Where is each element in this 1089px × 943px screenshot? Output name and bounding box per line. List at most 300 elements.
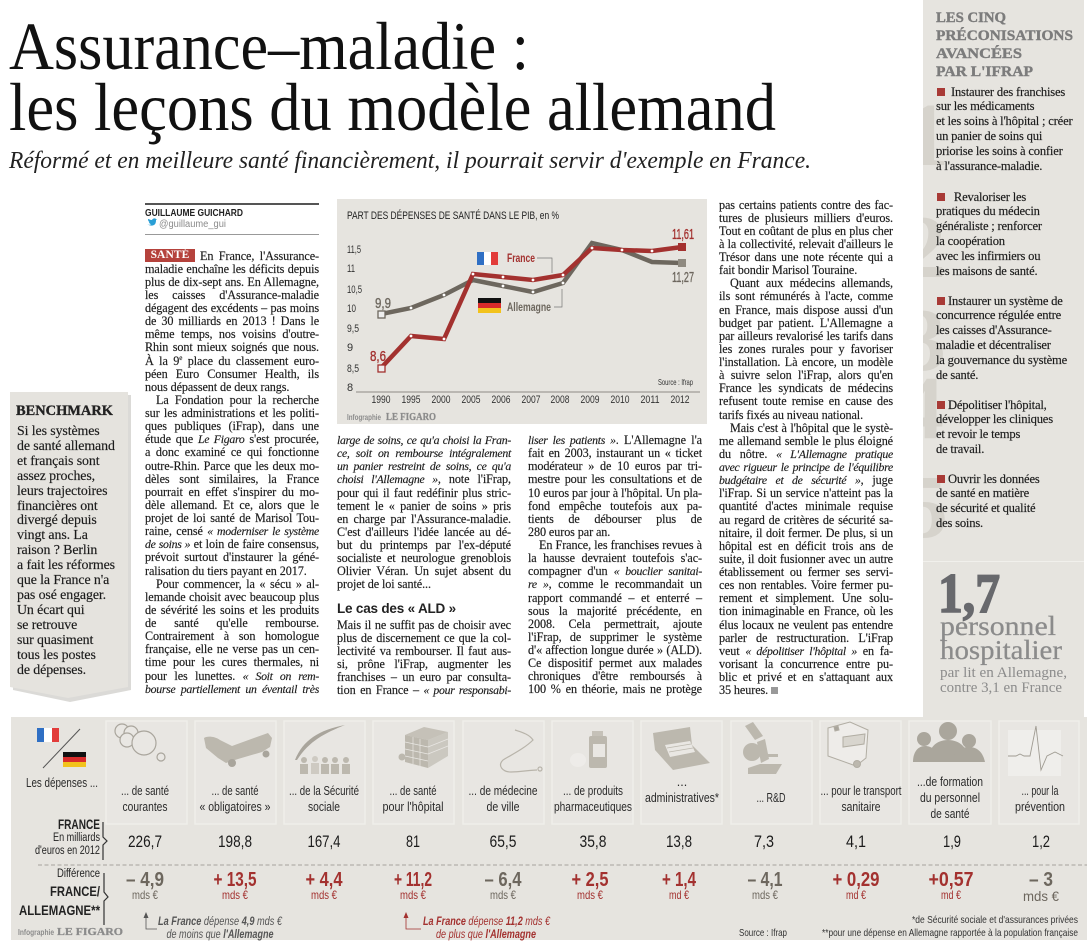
article column 1: raine, censé « moderniser le système: [145, 524, 319, 538]
article column 4: l'iFrap. Si un service n'atteint pas la: [719, 486, 893, 500]
article column 4: tarifs fixés au niveau national.: [719, 408, 863, 422]
article column 1: étude que Le Figaro s'est procurée,: [145, 432, 319, 446]
article column 4: par ailleurs revalorisé les tarifs dans: [719, 329, 893, 343]
recommendation 5: de sécurité et qualité: [936, 501, 1035, 515]
panel: sidebar préconisations: PAR L'IFRAP: [936, 64, 1033, 80]
recommendation 3: les caisses d'Assurance-: [936, 323, 1052, 337]
article column 2 continued: si, prône l'iFrap, augmenter les: [337, 657, 511, 671]
row label: france: En milliards: [53, 832, 100, 844]
recommendation 2: les maisons de santé.: [936, 264, 1037, 278]
text: 9: [347, 342, 353, 354]
text: tous les postes: [17, 648, 96, 663]
icon: hospital bed: [204, 733, 272, 767]
row: difference values: +0,57: [928, 869, 974, 891]
icon: social security: [295, 725, 350, 774]
row label: différence: FRANCE/: [50, 883, 100, 899]
column headings: du personnel: [920, 791, 980, 805]
recommendation 5: [936, 472, 1040, 530]
text: Infographie: [347, 413, 381, 422]
column headings: courantes: [122, 800, 168, 814]
article column 4: au regard de critères de sécurité sa-: [719, 512, 893, 526]
row: france values: 226,7: [128, 832, 162, 851]
article column 1: lemande choisit avec beaucoup plus: [145, 590, 319, 604]
article column 4: du nôtre. « L'Allemagne pratique: [719, 447, 893, 461]
text: 10: [347, 303, 356, 315]
recommendation 3: Instaurer un système de: [948, 294, 1063, 308]
article column 1: dèle allemand. Et ce, alors que le: [145, 498, 319, 512]
article column 4: budget par patient. L'Allemagne a: [719, 316, 893, 330]
recommendation 1: Instaurer des franchises: [951, 84, 1065, 98]
text: financières ont: [17, 499, 98, 514]
footnotes: [822, 914, 1078, 939]
row: units: mds €: [752, 888, 778, 902]
column headings: ... R&D: [756, 791, 786, 805]
article column 4: nitaire, il doit fermer. De plus, si un: [719, 526, 893, 540]
recommendation 3: maladie et décentraliser: [936, 338, 1051, 352]
recommendation 1: sur les médicaments: [936, 99, 1034, 113]
title: [9, 8, 776, 145]
article column 3: rapport commandé – et enterré –: [528, 590, 702, 604]
article column 1: nous dépassent de deux rangs.: [145, 380, 289, 394]
recommendation 4: développer les cliniques: [936, 412, 1053, 426]
text: leurs trajectoires: [17, 484, 107, 499]
key figure: 1,7 personnel hospitalier: par lit en Allemagne,: [940, 665, 1067, 681]
recommendation 4: de travail.: [936, 442, 984, 456]
column headings: [121, 775, 1065, 821]
text: Si les systèmes: [17, 424, 100, 439]
icon: document: [653, 727, 710, 770]
article column 1: dèles sont similaires, la France: [145, 472, 319, 486]
article column 4: parler de restructuration. L'iFrap: [719, 631, 893, 645]
article column 2: large de soins, ce qu'a choisi la Fran-: [337, 433, 511, 447]
text: et français sont: [17, 454, 99, 469]
article column 2: but du printemps par l'ex-député: [337, 538, 511, 552]
article column 1: de soins » et loin de faire consensus,: [145, 537, 319, 551]
row: difference values: + 4,4: [306, 869, 343, 891]
column headings: ... de santé: [121, 784, 169, 798]
byline: GUILLAUME GUICHARD: [145, 208, 243, 219]
panel: sidebar préconisations: AVANCÉES: [936, 45, 1022, 62]
key figure: 1,7 personnel hospitalier: contre 3,1 en France: [940, 680, 1062, 696]
article column 2 continued: Mais il ne suffit pas de choisir avec: [337, 618, 511, 632]
article column 4: rement et simplement. Une solu-: [719, 591, 893, 605]
article column 3: 10 euros par jour à l'hôpital. Un pla-: [528, 486, 702, 500]
text: 8,6: [370, 348, 386, 365]
article column 3: compagner d'un « bouclier sanitai-: [528, 564, 702, 578]
article column 1: ralisation du tiers payant en 2017.: [145, 564, 307, 578]
article column 4: tion inimaginable en France, où les: [719, 604, 893, 618]
icon: stethoscope: [501, 730, 542, 772]
article column 4: Trésor dans une note récente qui a: [719, 250, 893, 264]
text: 2009: [580, 394, 600, 406]
row: units: mds €: [1023, 888, 1059, 904]
article column 4: blic et privé et en s'attaquant aux: [719, 670, 893, 684]
recommendation 2: généraliste ; renforcer: [936, 219, 1042, 233]
row: difference values: [126, 869, 1053, 891]
recommendation 1: un panier de soins qui: [936, 129, 1042, 143]
row label: france: d'euros en 2012: [35, 845, 100, 857]
recommendation 2: [936, 190, 1042, 278]
article column 2: tement le « panier de soins » pris: [337, 499, 511, 513]
text: 2012: [670, 394, 690, 406]
recommendation 1: à l'assurance-maladie.: [936, 159, 1042, 173]
annotation: plus que l'Allemagne: [423, 914, 551, 941]
recommendation 2: la coopération: [936, 234, 1005, 248]
text: 1995: [402, 394, 420, 406]
row: difference values: – 4,1: [748, 869, 782, 891]
article column 4: tures de plusieurs milliers d'euros.: [719, 211, 893, 225]
column headings: « obligatoires »: [200, 800, 271, 814]
recommendation 2: avec les infirmiers ou: [936, 249, 1040, 263]
text: LE FIGARO: [386, 412, 436, 423]
article column 1: pour les lunettes. « Soit on rem-: [145, 668, 319, 682]
article column 3: fond empêche toutefois aux pa-: [528, 499, 702, 513]
article column 1: [145, 248, 320, 696]
article column 1: de 30 milliards en 2013 ! Dans le: [145, 314, 319, 328]
row: france values: 167,4: [308, 832, 340, 851]
column headings: ... pour la: [1022, 784, 1059, 798]
annotation: moins que l'Allemagne: de moins que l'Allemagne: [166, 927, 274, 941]
text: 9,9: [375, 295, 391, 312]
article column 4: vorisant la concurrence entre pu-: [719, 657, 893, 671]
row: units: mds €: [400, 888, 426, 902]
text: raison ? Berlin: [17, 543, 97, 558]
article column 3: 100 % en théorie, mais ne protège: [528, 682, 702, 696]
icon: ambulance: [828, 722, 868, 768]
row: france values: 65,5: [490, 832, 516, 851]
text: 2011: [640, 394, 660, 406]
key figure: 1,7 personnel hospitalier: personnel: [940, 611, 1056, 641]
icon: coins: [115, 724, 165, 761]
article column 4: les zones rurales pour y favoriser: [719, 342, 893, 356]
row: units: mds €: [490, 888, 516, 902]
recommendation 2: Revaloriser les: [954, 190, 1026, 204]
row: france values: 4,1: [846, 832, 866, 851]
text: France: [507, 251, 535, 265]
column headings: ... de produits: [563, 784, 623, 798]
text: a fait les réformes: [17, 558, 115, 573]
row: difference values: – 4,9: [126, 869, 164, 891]
article column 4: veut « dépolitiser l'hôpital » en fa-: [719, 644, 893, 658]
article column 3: la hausse devraient toutefois s'ac-: [528, 551, 702, 565]
row: difference values: + 13,5: [214, 869, 256, 891]
icon: france germany flags: [37, 728, 86, 768]
recommendation 5: de santé en matière: [936, 486, 1029, 500]
row: units: mds €: [311, 888, 337, 902]
source: Source : Ifrap: [739, 927, 787, 939]
article column 1: En France, l'Assurance-: [200, 248, 319, 262]
row label: différence: [19, 868, 100, 918]
article column 1: de sévérité les soins et les produits: [145, 603, 319, 617]
article column 1: La Fondation pour la recherche: [156, 393, 319, 407]
panel: sidebar préconisations: LES CINQ: [936, 10, 1006, 26]
article column 4: l'installation. Là encore, un modèle: [719, 355, 893, 369]
recommendation 2: pratiques du médecin: [936, 204, 1040, 218]
text: Allemagne: [507, 300, 551, 314]
row: difference values: + 0,29: [832, 869, 880, 891]
article column 4: avec rigueur le principe de l'équilibre: [719, 460, 893, 474]
chart panel: part des dépenses de santé dans le PIB: [337, 199, 707, 424]
article column 1: pourrait en effet s'inspirer du mo-: [145, 485, 319, 499]
article column 4: ces non rentables. Voire fermer pu-: [719, 578, 893, 592]
article column 4: 35 heures.: [719, 683, 768, 697]
article column 4: quantité d'actes minimale requise: [719, 499, 893, 513]
text: 2008: [550, 394, 570, 406]
article column 3: sous la majorité précédente, en: [528, 604, 702, 618]
article column 4: en France, mais dispose aussi d'un: [719, 302, 893, 316]
annotation: moins que l'Allemagne: La France dépense 4,9 mds €: [158, 914, 283, 928]
text: 11,61: [672, 226, 694, 243]
article column 2: ce, soit on rembourse intégralement: [337, 446, 511, 460]
row: units: md €: [941, 888, 961, 902]
annotation: plus que l'Allemagne: de plus que l'Allemagne: [436, 927, 536, 941]
icon: surgeons: [913, 722, 985, 762]
column headings: pour l'hôpital: [382, 800, 444, 814]
key figure: 1,7 personnel hospitalier: 1,7: [938, 563, 1000, 625]
article column 1: sur les administrations et les politi-: [145, 406, 319, 420]
article column 2: pour qui il faut redéfinir plus stric-: [337, 486, 511, 500]
article column 1: les caisses d'Assurance-maladie: [145, 288, 319, 302]
article column 3: re », comme le recommandait un: [528, 577, 702, 591]
row: units: mds €: [577, 888, 603, 902]
row label: différence: ALLEMAGNE**: [19, 902, 100, 918]
row: france values: [128, 832, 1050, 851]
article column 1: projet de loi santé de Marisol Tou-: [145, 511, 319, 525]
article column 2: Olivier Véran. Un sujet absent du: [337, 564, 511, 578]
recommendation 1: et les soins à l'hôpital ; créer: [936, 114, 1072, 128]
text: se retrouve: [17, 618, 77, 633]
text: PART DES DÉPENSES DE SANTÉ DANS LE PIB, en %: [347, 209, 559, 222]
article column 1: de santé qu'elle rembourse.: [145, 616, 319, 630]
column headings: ...: [677, 775, 687, 789]
article column 2 continued: lectivité va rembourser. Il faut aus-: [337, 644, 511, 658]
byline: [145, 203, 319, 235]
article column 1: prévoit surtout d'instaurer la géné-: [145, 550, 319, 564]
article column 2 continued: [337, 618, 511, 697]
article column 2: projet de loi santé...: [337, 577, 431, 591]
annotation: plus que l'Allemagne: La France dépense 11,2 mds €: [423, 914, 551, 928]
row label: france: FRANCE: [58, 816, 100, 832]
article column 4: pas certains patients contre des fac-: [719, 198, 893, 212]
row: difference values: + 11,2: [394, 869, 432, 891]
icon: microscope: [743, 722, 782, 774]
text: sur quasiment: [17, 633, 93, 648]
article column 4: refusent toute remise en cause des: [719, 394, 893, 408]
article column 2: choisi l'Allemagne », note l'iFrap,: [337, 472, 511, 486]
text: de dépenses.: [17, 662, 86, 678]
title: Assurance–maladie :: [9, 8, 529, 84]
text: Source : Ifrap: [658, 377, 693, 387]
row: difference values: + 1,4: [662, 869, 697, 891]
article column 2: en charge par l'Assurance-maladie.: [337, 512, 511, 526]
article column 1: a donc examiné ce qui fonctionne: [145, 445, 319, 459]
column headings: sociale: [308, 800, 340, 814]
annotation: moins que l'Allemagne: [158, 914, 283, 941]
row label: france: [35, 816, 100, 857]
article column 1: dégagent des excédents – pas moins: [145, 301, 319, 315]
article column 3: modérateur » de 10 euros par tri-: [528, 459, 702, 473]
row: france values: 35,8: [580, 832, 606, 851]
recommendation 5: Ouvrir les données: [948, 472, 1040, 486]
article column 2: [336, 433, 512, 591]
column headings: de ville: [486, 800, 520, 814]
text: 9,5: [347, 323, 359, 335]
recommendation 3: concurrence régulée entre: [936, 308, 1061, 322]
article column 3: fait en 2003, instaurant un « ticket: [528, 446, 702, 460]
text: que la France n'a: [17, 573, 109, 588]
text: BENCHMARK: [16, 403, 113, 419]
recommendation 4: Dépolitiser l'hôpital,: [948, 398, 1047, 412]
article column 3: 280 euros par an.: [528, 525, 610, 539]
subtitle: Réformé et en meilleure santé financièrement, il pourrait servir d'exemple en France.: [8, 148, 811, 174]
article column 1: Rhin sont mieux soignés que nous.: [145, 340, 319, 354]
row label: différence: Différence: [57, 868, 100, 880]
column headings: ...de formation: [917, 775, 983, 789]
row: france values: 1,9: [943, 832, 961, 851]
text: assez proches,: [17, 469, 95, 484]
panel: sidebar préconisations: [923, 0, 1084, 718]
row: difference values: + 2,5: [572, 869, 608, 891]
article column 4: hôpital est en déficit trois ans de: [719, 539, 893, 553]
text: 11,5: [347, 244, 361, 256]
article column 4: Quant aux médecins allemands,: [730, 276, 893, 290]
article column 2 continued: plus de discernement ce que la col-: [337, 631, 511, 645]
key figure: 1,7 personnel hospitalier: hospitalier: [940, 635, 1062, 665]
article column 3: En France, les franchises revues à: [539, 538, 702, 552]
article column 3: chroniques d'être remboursés à: [528, 669, 702, 683]
icon: ecg: [1008, 726, 1063, 776]
article column 4: [718, 198, 894, 697]
credit: infographie le figaro: Infographie: [18, 928, 54, 937]
article column 2 continued: franchises – un euro par consulta-: [337, 670, 511, 684]
panel: sidebar préconisations: PRÉCONISATIONS: [936, 27, 1073, 44]
article column 3: [528, 433, 702, 696]
article column 4: Mais c'est à l'hôpital que le systè-: [730, 421, 893, 435]
santé tag: SANTÉ: [151, 249, 189, 261]
row: france values: 7,3: [754, 832, 774, 851]
recommendation 3: de santé.: [936, 368, 978, 382]
article column 4: Tout en coûtant de plus en plus cher: [719, 224, 893, 238]
column headings: pharmaceutiques: [554, 800, 632, 814]
article column 3: liser les patients ». L'Allemagne l'a: [528, 433, 702, 447]
text: pas osé engager.: [17, 588, 106, 603]
column headings: ... de la Sécurité: [289, 784, 359, 798]
credit: infographie le figaro: LE FIGARO: [57, 926, 123, 938]
recommendation 1: priorise les soins à confier: [936, 144, 1063, 158]
article column 4: fait bondir Marisol Touraine.: [719, 263, 857, 277]
arrow: annotation france 11,2: [404, 912, 421, 929]
article column 1: maladie enchaîne les déficits depuis: [145, 262, 319, 276]
article column 4: me allemand semble le plus éloigné: [719, 434, 893, 448]
text: vingt ans. La: [17, 528, 88, 543]
text: 1990: [372, 394, 390, 406]
bracket: [103, 822, 108, 925]
article column 4: ils sont rémunérés à l'acte, comme: [719, 289, 893, 303]
article column 2: socialiste et neurologue grenoblois: [337, 551, 511, 565]
row: difference values: – 3: [1029, 869, 1053, 891]
column headings: de santé: [930, 807, 970, 821]
article column 4: élus locaux ne veulent pas entendre: [719, 618, 893, 632]
title: les leçons du modèle allemand: [9, 69, 776, 145]
text: 2007: [522, 394, 540, 406]
icon: hospital: [398, 727, 448, 768]
column headings: ... de santé: [390, 784, 437, 798]
text: 10,5: [347, 284, 362, 296]
article column 4: à la collectivité, relevait d'ailleurs le: [719, 237, 893, 251]
row: units: mds €: [222, 888, 248, 902]
row label: les dépenses: Les dépenses ...: [26, 776, 98, 790]
icon: pills and bottle: [570, 731, 607, 768]
column headings: sanitaire: [842, 800, 881, 814]
article column 4: France les syndicats de médecins: [719, 381, 893, 395]
row: france values: 198,8: [218, 832, 252, 851]
article column 1: Contrairement à son homologue: [145, 629, 319, 643]
article column 4: budgétaire et de sécurité », juge: [719, 473, 893, 487]
recommendation 5: des soins.: [936, 516, 983, 530]
text: 2000: [432, 394, 450, 406]
subheading: le cas des ALD: Le cas des « ALD »: [337, 601, 456, 616]
article column 1: bourse partiellement un éventail très: [145, 682, 319, 696]
row: difference values: – 6,4: [484, 869, 522, 891]
article column 4: suite, il doit fusionner avec un autre: [719, 552, 893, 566]
article column 1: ques publiques (iFrap), dans une: [145, 419, 319, 433]
column headings: ... pour le transport: [820, 784, 902, 798]
text: 2005: [462, 394, 480, 406]
recommendation 1: [936, 84, 1073, 173]
text: 8: [347, 382, 353, 394]
article column 3: mestre pour les consultations et de: [528, 472, 702, 486]
byline: @guillaume_gui: [159, 219, 226, 230]
article column 1: péen Euro Consumer Health, ils: [145, 367, 319, 381]
text: 2010: [610, 394, 630, 406]
article column 4: à suivre selon l'iFrap, alors qu'en: [719, 368, 893, 382]
article column 2: C'est d'ailleurs l'idée lancée au dé-: [337, 525, 511, 539]
benchmark box: [10, 392, 131, 702]
article column 1: même temps, nos voisins d'outre-: [145, 327, 319, 341]
row: france values: 13,8: [666, 832, 692, 851]
recommendation 3: la gouvernance du système: [936, 353, 1067, 367]
key figure: 1,7 personnel hospitalier: [938, 563, 1067, 696]
article column 2 continued: tion en France – « pour responsabi-: [337, 683, 511, 697]
article column 1: À la 9e place du classement euro-: [145, 353, 319, 368]
column headings: prévention: [1015, 800, 1065, 814]
article column 3: d'« affection longue durée » (ALD).: [528, 643, 702, 657]
recommendation 4: [936, 398, 1053, 456]
article column 1: française, elle ne verse pas un cen-: [145, 642, 319, 656]
credit: infographie le figaro: [18, 926, 123, 938]
row: units: mds €: [132, 888, 158, 902]
row: units: md €: [846, 888, 866, 902]
text: 2006: [492, 394, 510, 406]
row: france values: 81: [406, 832, 420, 851]
row: units: md €: [669, 888, 689, 902]
recommendation 3: [936, 294, 1067, 382]
article column 2: un panier restreint de soins, ce qu'a: [337, 459, 511, 473]
text: 11: [347, 263, 355, 275]
text: divergé depuis: [17, 513, 97, 528]
recommendation 4: et revoir le temps: [936, 427, 1020, 441]
text: 8,5: [347, 363, 359, 375]
article column 1: time pour les cures thermales, ni: [145, 655, 319, 669]
arrow: annotation france 4,9: [144, 912, 157, 929]
row: france values: 1,2: [1032, 832, 1050, 851]
column headings: ... de médecine: [468, 784, 538, 798]
text: Un écart qui: [17, 603, 84, 618]
article column 3: tients de débourser plus de: [528, 512, 702, 526]
article column 3: 2008. Cela permettrait, ajoute: [528, 617, 702, 631]
article column 1: outre-Rhin. Parce que les deux mo-: [145, 458, 319, 472]
text: de santé allemand: [17, 439, 115, 454]
